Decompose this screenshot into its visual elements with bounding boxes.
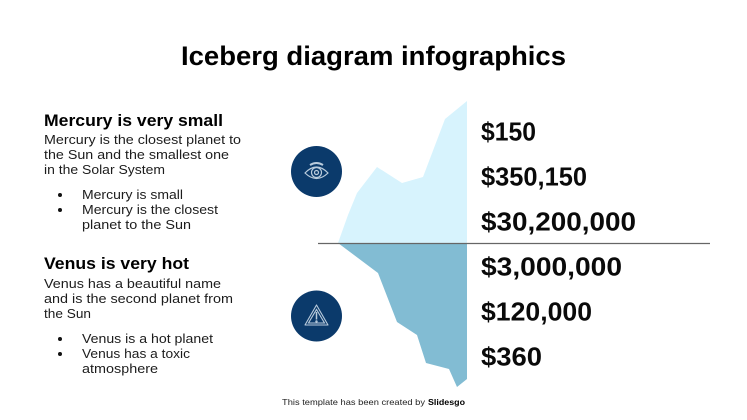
values above water <box>481 118 636 236</box>
bullet list: Venus: Venus is a hot planet <box>82 331 213 346</box>
values below water: $120,000 <box>481 298 592 326</box>
iceberg: above water <box>338 101 467 243</box>
bullet list: Venus: Venus has a toxic <box>82 346 191 361</box>
description: Mercury: the Sun and the smallest one <box>44 147 229 162</box>
values above water: $350,150 <box>481 164 587 192</box>
title: Iceberg diagram infographics <box>181 41 566 71</box>
bullet list: Venus <box>58 331 213 376</box>
footer credit: This template has been created by <box>282 397 426 407</box>
panel: Mercury text block <box>44 112 241 232</box>
values below water <box>481 254 622 372</box>
bullet list: Mercury: Mercury is the closest <box>82 202 218 217</box>
bullet list: Mercury: planet to the Sun <box>82 217 191 232</box>
description: Venus <box>44 276 233 321</box>
description: Mercury: in the Solar System <box>44 162 165 177</box>
description: Venus: and is the second planet from <box>44 291 233 306</box>
description: Mercury <box>44 132 241 177</box>
footer credit: Slidesgo <box>428 397 465 407</box>
iceberg: below water <box>338 243 467 387</box>
icon: warning <box>291 290 342 342</box>
bullet list: Venus: atmosphere <box>82 361 158 376</box>
description: Venus: the Sun <box>44 306 91 321</box>
bullet list: Mercury <box>58 187 218 232</box>
heading: Mercury: Mercury is very small <box>44 112 223 130</box>
description: Mercury: Mercury is the closest planet to <box>44 132 241 147</box>
values above water: $150 <box>481 118 536 146</box>
heading: Venus: Venus is very hot <box>44 255 190 273</box>
icon: eye <box>291 146 342 197</box>
panel: Venus text block <box>44 255 233 376</box>
description: Venus: Venus has a beautiful name <box>44 276 221 291</box>
waterline <box>318 242 710 244</box>
bullet list: Mercury: Mercury is small <box>82 187 183 202</box>
values below water: $360 <box>481 344 542 372</box>
values above water: $30,200,000 <box>481 208 636 236</box>
values below water: $3,000,000 <box>481 254 622 282</box>
